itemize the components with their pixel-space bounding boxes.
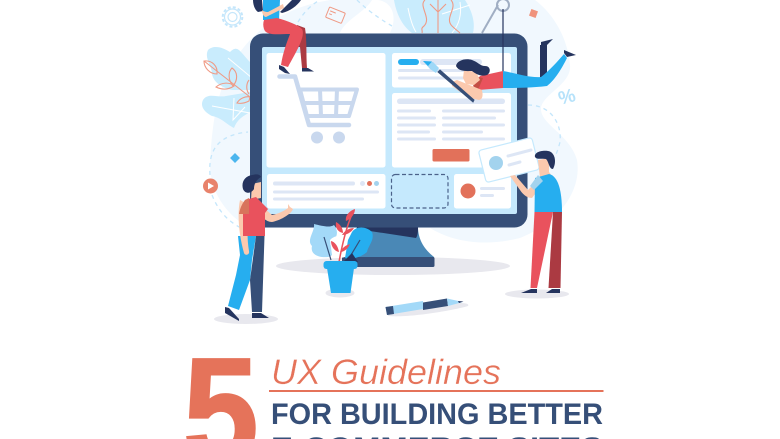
plant bbox=[310, 209, 373, 293]
icon: percent: % bbox=[556, 85, 578, 110]
icon: diamond blue bbox=[230, 153, 240, 163]
pen shadow bbox=[388, 303, 468, 316]
title rule bbox=[269, 390, 604, 392]
icon: shopping cart bbox=[280, 76, 357, 144]
person standing left bbox=[225, 174, 293, 321]
button bbox=[432, 149, 470, 162]
pen bbox=[386, 298, 464, 315]
person sitting on monitor bbox=[253, 0, 314, 74]
dashed placeholder bbox=[392, 174, 448, 208]
icon: play button bbox=[203, 178, 218, 194]
dashed orbit lines bbox=[210, 0, 560, 232]
monitor shadow bbox=[276, 257, 510, 275]
screen bbox=[262, 47, 517, 214]
title line 2: FOR BUILDING BETTER bbox=[271, 398, 603, 431]
floating card bbox=[478, 137, 540, 183]
monitor bbox=[250, 34, 528, 228]
monitor base bbox=[342, 257, 434, 267]
panel: content bbox=[392, 93, 511, 168]
person standing right bbox=[510, 151, 562, 293]
person right shadow bbox=[505, 290, 569, 298]
person left shadow bbox=[214, 314, 278, 324]
person hanging with paintbrush bbox=[423, 9, 576, 102]
panel: product bbox=[266, 53, 386, 168]
top foliage bbox=[394, 0, 474, 33]
plant shadow bbox=[326, 288, 354, 298]
monitor stand bbox=[345, 227, 434, 260]
hook bbox=[482, 0, 509, 33]
icon: credit card bbox=[326, 7, 345, 23]
pot bbox=[327, 268, 354, 293]
background blobs bbox=[210, 0, 578, 243]
left foliage bbox=[202, 47, 252, 128]
panel: bottom right bbox=[454, 174, 511, 208]
title line 1: UX Guidelines bbox=[271, 353, 501, 392]
cord bbox=[502, 9, 504, 88]
icon: diamond orange bbox=[529, 9, 538, 18]
panel: top right bbox=[392, 53, 511, 88]
icon: gear bbox=[223, 7, 242, 27]
panel: bottom left bbox=[267, 174, 386, 208]
